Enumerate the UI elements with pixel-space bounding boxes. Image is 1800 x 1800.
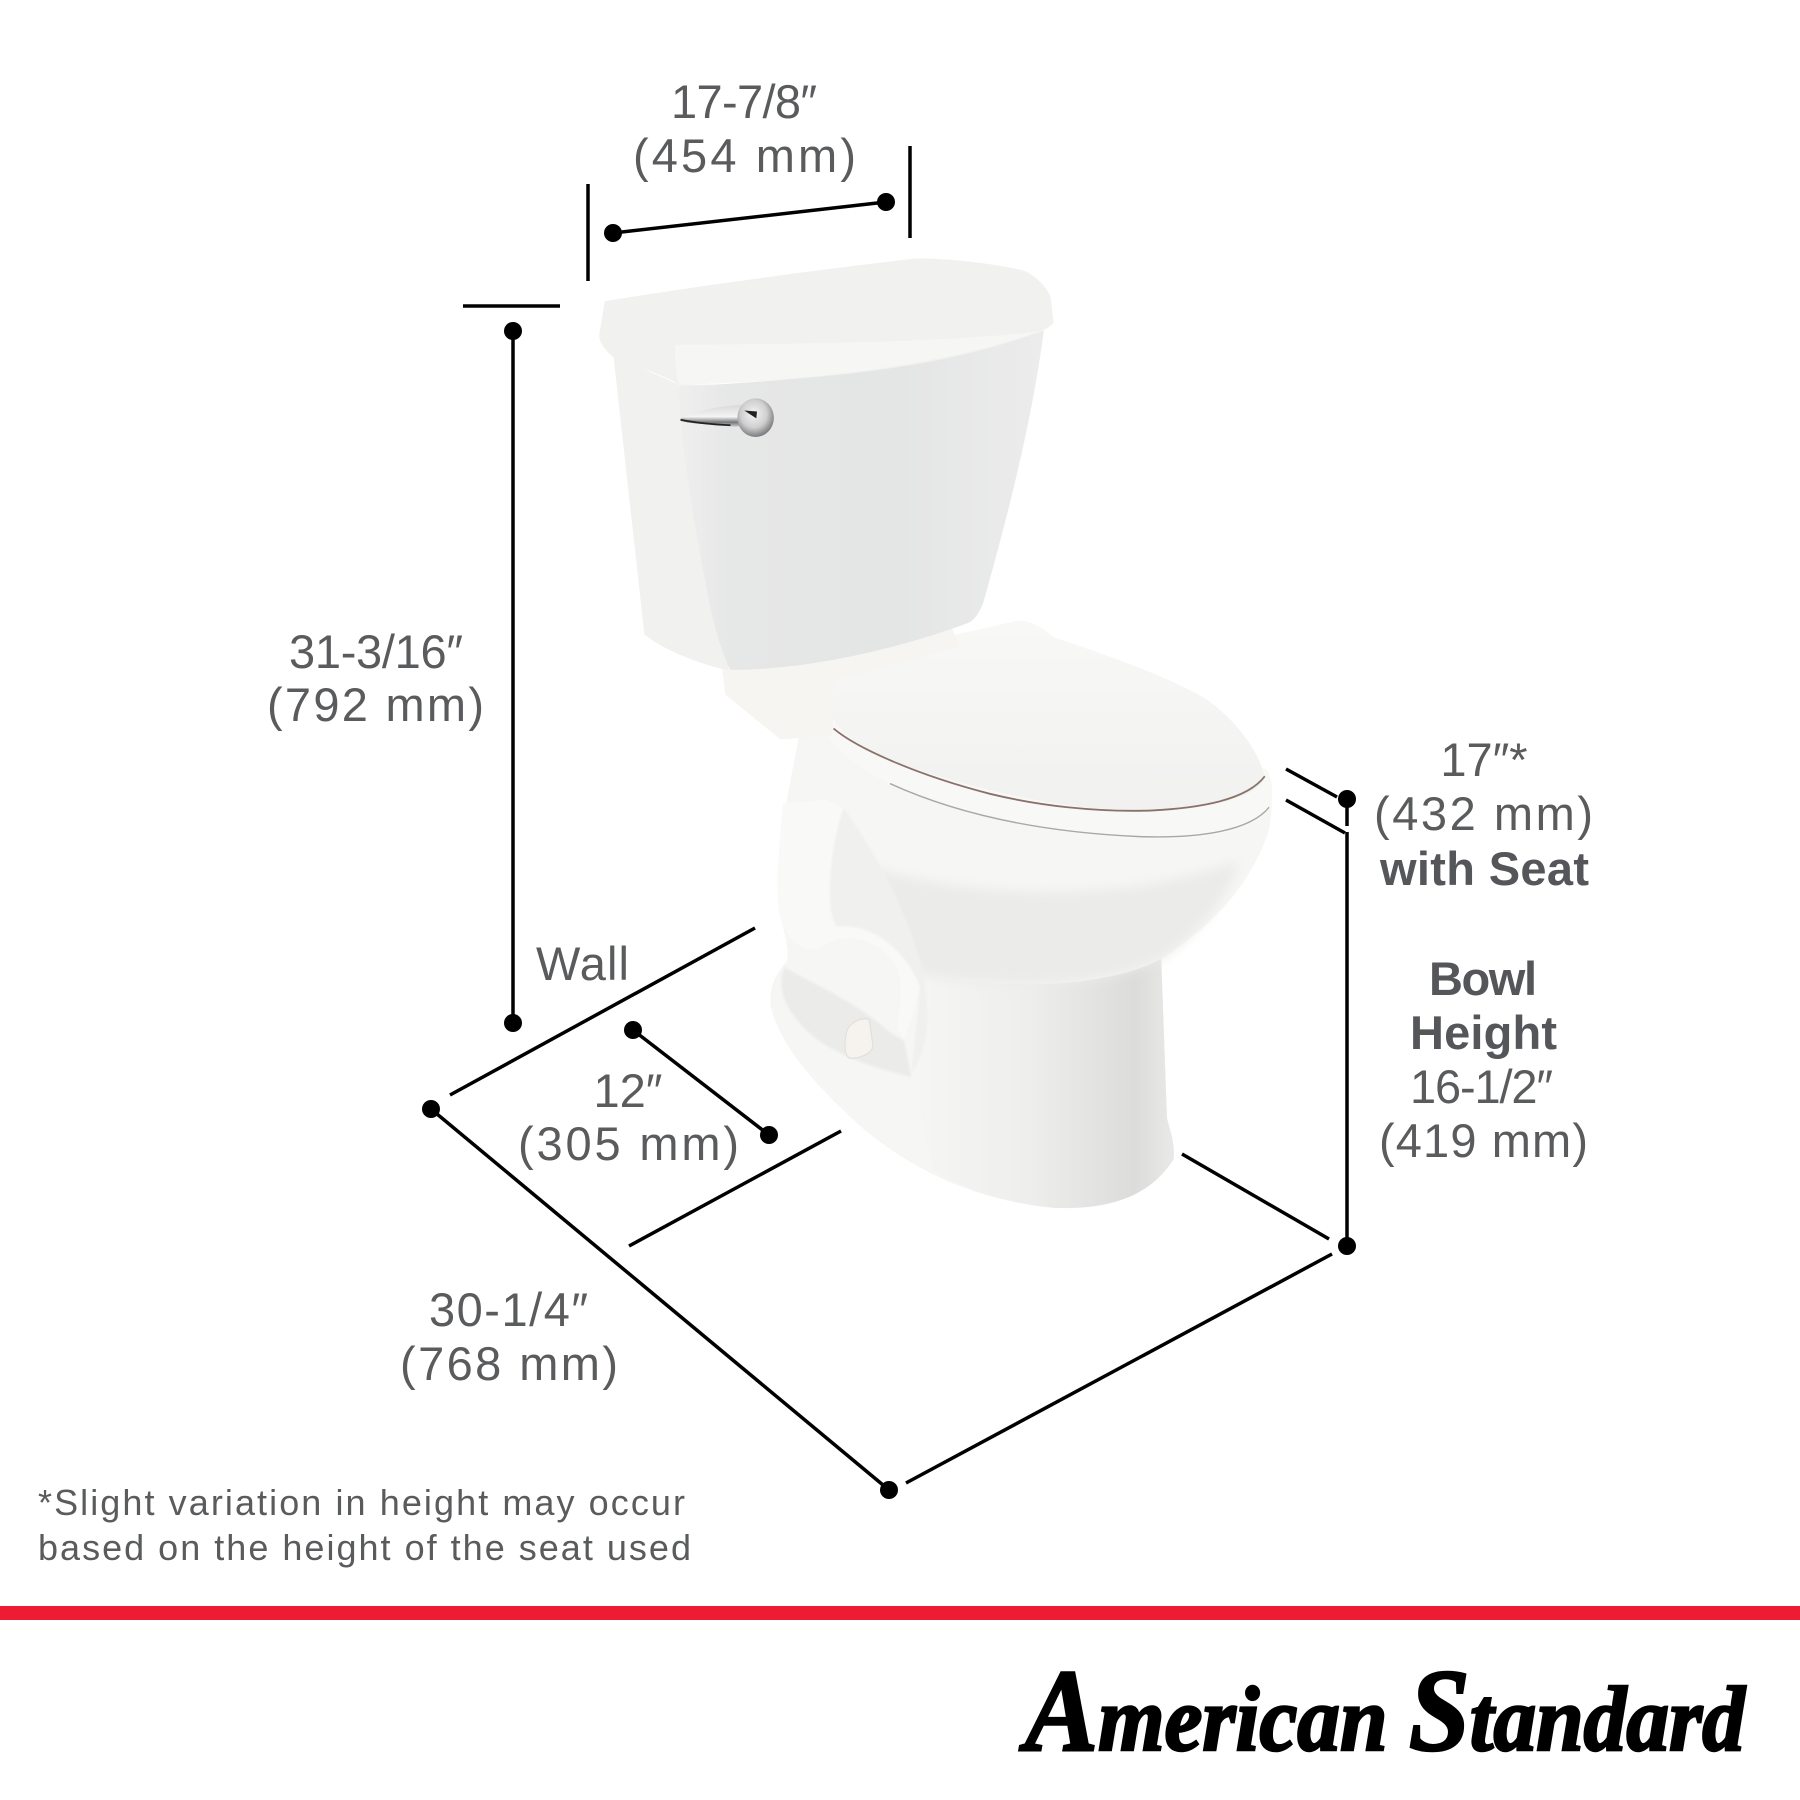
dimension: bowl height — [1286, 769, 1356, 1255]
lid top — [599, 259, 1054, 385]
trapway recess — [830, 808, 927, 1073]
tick — [463, 304, 560, 308]
label: bowl height: (419 mm) — [1379, 1114, 1588, 1167]
seat arrow — [1345, 799, 1349, 826]
label: with seat height: (432 mm) — [1374, 787, 1593, 840]
handle streak — [681, 420, 730, 425]
label: with seat height: 17″* — [1440, 733, 1528, 786]
flush handle — [681, 398, 774, 437]
label: wall: Wall — [536, 937, 629, 990]
base recess — [781, 967, 911, 1077]
tick right — [908, 146, 912, 238]
seat gap line — [834, 729, 1265, 811]
label: bowl height — [1379, 952, 1588, 1167]
handle lever — [681, 405, 756, 427]
tank side — [613, 355, 732, 670]
arrow — [511, 331, 515, 1023]
label: 31-3/16″ — [289, 625, 463, 678]
toilet tank — [599, 259, 1054, 739]
red divider — [0, 1606, 1800, 1620]
seat lid — [829, 621, 1264, 810]
footnote — [38, 1482, 691, 1568]
label: with seat height — [1374, 733, 1593, 895]
tick left — [586, 184, 590, 281]
handle glint — [744, 410, 757, 418]
label: 12″ — [594, 1064, 662, 1117]
toilet bowl and seat — [736, 621, 1272, 1208]
dimension: rough-in — [594, 1021, 841, 1246]
arrow — [633, 1030, 769, 1135]
trapway — [778, 800, 920, 1041]
label: 454 mm: (454 mm) — [633, 129, 856, 182]
footnote: *Slight variation in height may occur — [38, 1482, 685, 1523]
handle ball — [737, 398, 774, 437]
dimension: depth — [422, 1100, 898, 1499]
arrow — [1345, 832, 1349, 1246]
footnote: based on the height of the seat used — [38, 1527, 691, 1568]
arrow — [613, 202, 886, 233]
floor lines — [906, 1154, 1332, 1483]
bowl shading — [847, 861, 1240, 984]
tank connector — [722, 626, 960, 739]
label: bowl height: Height — [1410, 1006, 1557, 1059]
bowl neck — [736, 653, 833, 739]
dimension: overall height — [289, 306, 560, 1032]
arrow — [431, 1109, 889, 1490]
pedestal shading — [911, 959, 1174, 1208]
label: 768 mm: (768 mm) — [400, 1337, 618, 1390]
bowl body — [770, 722, 1272, 1208]
tank front — [679, 330, 1044, 670]
extension line — [629, 1131, 841, 1246]
label: 305 mm: (305 mm) — [518, 1117, 739, 1170]
label: bowl height: Bowl — [1429, 952, 1537, 1005]
dimension: tank width — [588, 75, 910, 281]
label: with seat height: with Seat — [1379, 842, 1589, 895]
lid front face — [675, 330, 1044, 385]
seat ring — [825, 722, 1272, 839]
wall line — [450, 928, 755, 1095]
label: 17-7/8″ — [671, 75, 817, 128]
label: bowl height: 16-1/2″ — [1410, 1060, 1553, 1113]
seat ring line — [890, 784, 1269, 837]
toilet illustration — [599, 259, 1272, 1208]
label: 792 mm: (792 mm) — [267, 678, 484, 731]
label: 30-1/4″ — [429, 1283, 588, 1336]
bolt cap — [845, 1019, 873, 1058]
ticks — [1286, 769, 1345, 833]
logo: American Standard — [1019, 1645, 1747, 1776]
